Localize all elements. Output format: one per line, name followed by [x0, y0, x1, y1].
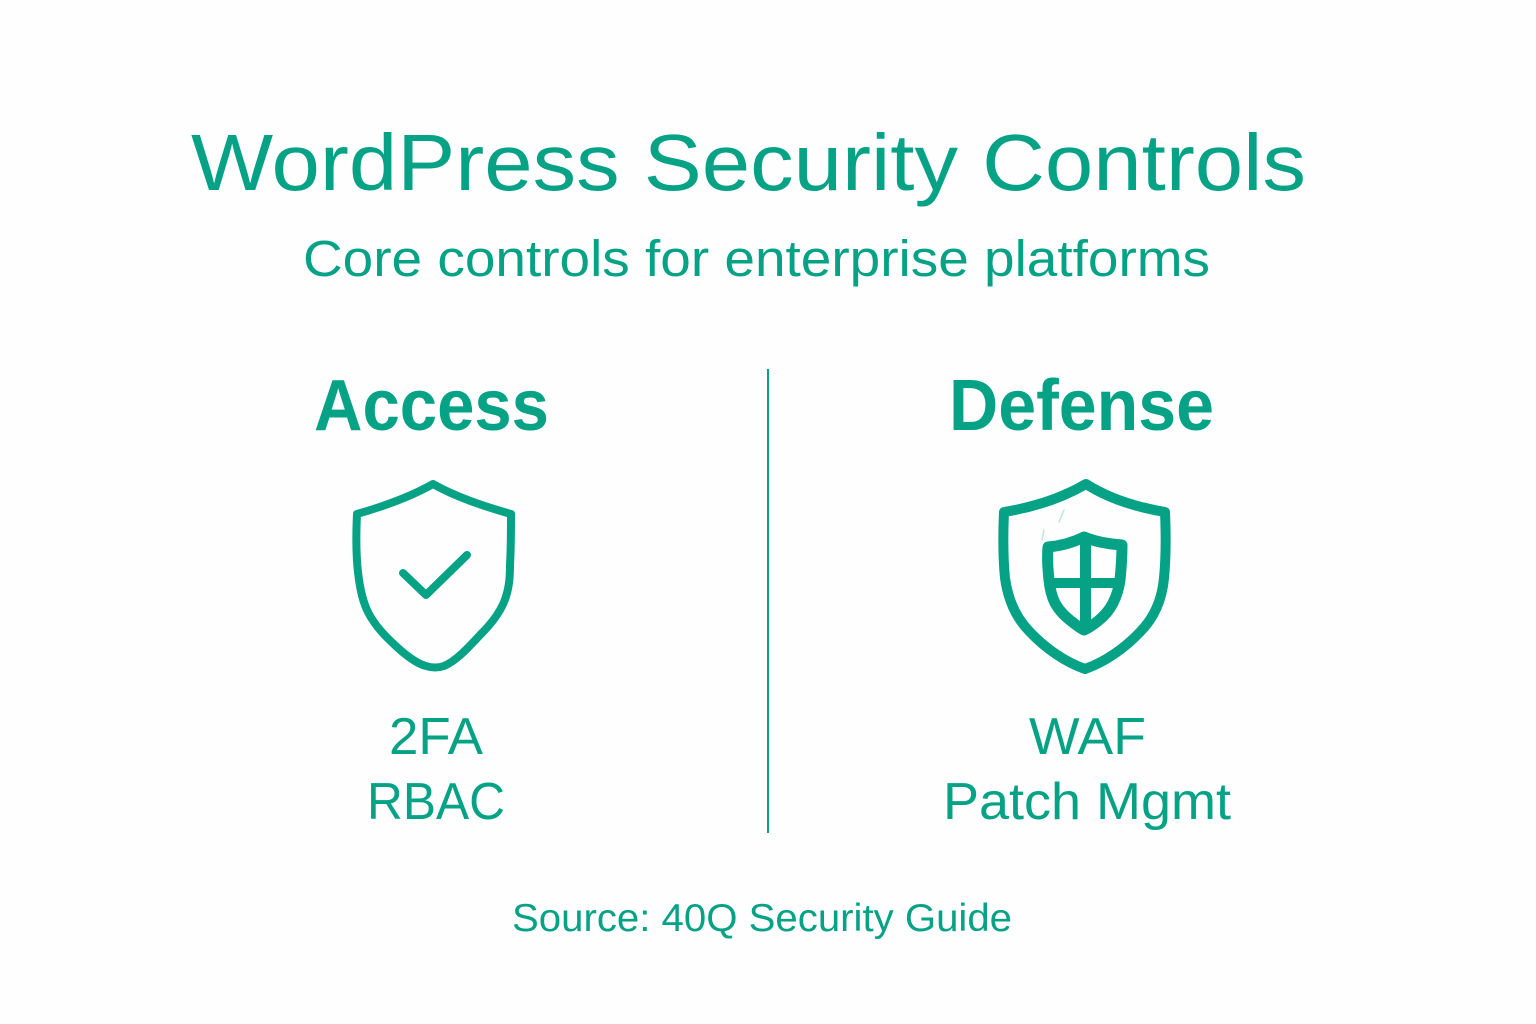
list: defense controls — [943, 708, 1232, 831]
list: defense controls: WAF — [1029, 708, 1146, 766]
title: WordPress Security Controls — [191, 118, 1306, 207]
subtitle: Core controls for enterprise platforms — [303, 230, 1210, 287]
panel: access — [314, 366, 549, 831]
list: defense controls: Patch Mgmt — [943, 773, 1232, 831]
heading: defense: Defense — [949, 366, 1214, 446]
icon: shield with check mark — [356, 484, 511, 668]
list: access controls: RBAC — [367, 773, 505, 831]
panel: defense — [943, 366, 1232, 831]
divider — [767, 369, 769, 833]
source note: Source: 40Q Security Guide — [512, 897, 1012, 940]
icon: shield with crest — [1003, 484, 1166, 669]
list: access controls: 2FA — [389, 708, 483, 766]
list: access controls — [367, 708, 505, 831]
heading: access: Access — [314, 366, 549, 446]
